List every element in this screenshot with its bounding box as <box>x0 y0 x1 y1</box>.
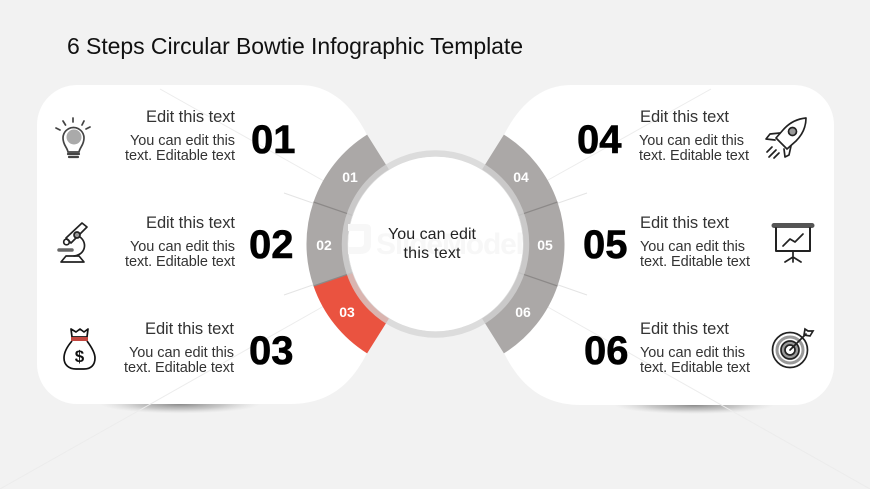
step 03 text: Edit this text <box>145 320 234 338</box>
title: 6 Steps Circular Bowtie Infographic Template <box>67 33 523 59</box>
center text <box>388 226 477 262</box>
segment 05 <box>519 202 565 286</box>
segment numbers: 04 <box>513 169 529 185</box>
step 02 text: You can edit this <box>130 239 235 255</box>
icon: rocket <box>766 118 806 158</box>
segment numbers: 03 <box>339 304 355 320</box>
segment 01 <box>314 135 389 215</box>
icon: money bag <box>64 329 95 369</box>
segment numbers: 05 <box>537 237 553 253</box>
step 01 text: You can edit this <box>130 133 235 149</box>
segment numbers <box>316 169 553 320</box>
center text: You can edit <box>388 226 477 243</box>
segment numbers: 02 <box>316 237 332 253</box>
step 04 text: Edit this text <box>640 108 729 126</box>
step 05 text: text. Editable text <box>640 254 750 270</box>
segment 02 <box>306 202 352 286</box>
step 01 number: 01 <box>251 118 296 162</box>
step 04 text <box>639 108 749 164</box>
icon: money bag: $ <box>75 347 85 366</box>
step 02 text: Edit this text <box>146 214 235 232</box>
step 03 text: text. Editable text <box>124 360 234 376</box>
segment numbers: 06 <box>515 304 531 320</box>
panel: left <box>37 85 420 404</box>
step 04 number: 04 <box>577 118 622 162</box>
segment 06 <box>482 273 558 353</box>
segment numbers: 01 <box>342 169 358 185</box>
step 02 number: 02 <box>249 223 294 267</box>
center text: this text <box>404 245 461 262</box>
step 02 text: text. Editable text <box>125 254 235 270</box>
step 04 text: You can edit this <box>639 133 744 149</box>
panel shadows <box>100 394 774 414</box>
step 02 text <box>125 214 235 270</box>
segment 03 <box>314 273 389 353</box>
step 03 number: 03 <box>249 329 294 373</box>
circular bowtie ring <box>306 135 565 353</box>
step 05 text: You can edit this <box>640 239 745 255</box>
step 06 text <box>640 320 750 376</box>
step 05 number: 05 <box>583 223 628 267</box>
icon: target <box>772 329 813 368</box>
step 05 text <box>640 214 750 270</box>
icon: light bulb <box>56 118 90 157</box>
step 06 number: 06 <box>584 329 628 373</box>
icon: presentation board <box>774 226 812 262</box>
step 01 text <box>125 108 235 164</box>
step 06 text: Edit this text <box>640 320 729 338</box>
step 06 text: You can edit this <box>640 345 745 361</box>
watermark: SlideModel <box>376 228 524 261</box>
segment 04 <box>482 135 558 215</box>
center ring <box>345 154 526 334</box>
panel: right <box>451 85 834 405</box>
step 05 text: Edit this text <box>640 214 729 232</box>
step 01 text: text. Editable text <box>125 148 235 164</box>
step 03 text: You can edit this <box>129 345 234 361</box>
step 03 text <box>124 320 234 376</box>
step 01 text: Edit this text <box>146 108 235 126</box>
icon: microscope <box>59 223 87 262</box>
step 06 text: text. Editable text <box>640 360 750 376</box>
step 04 text: text. Editable text <box>639 148 749 164</box>
